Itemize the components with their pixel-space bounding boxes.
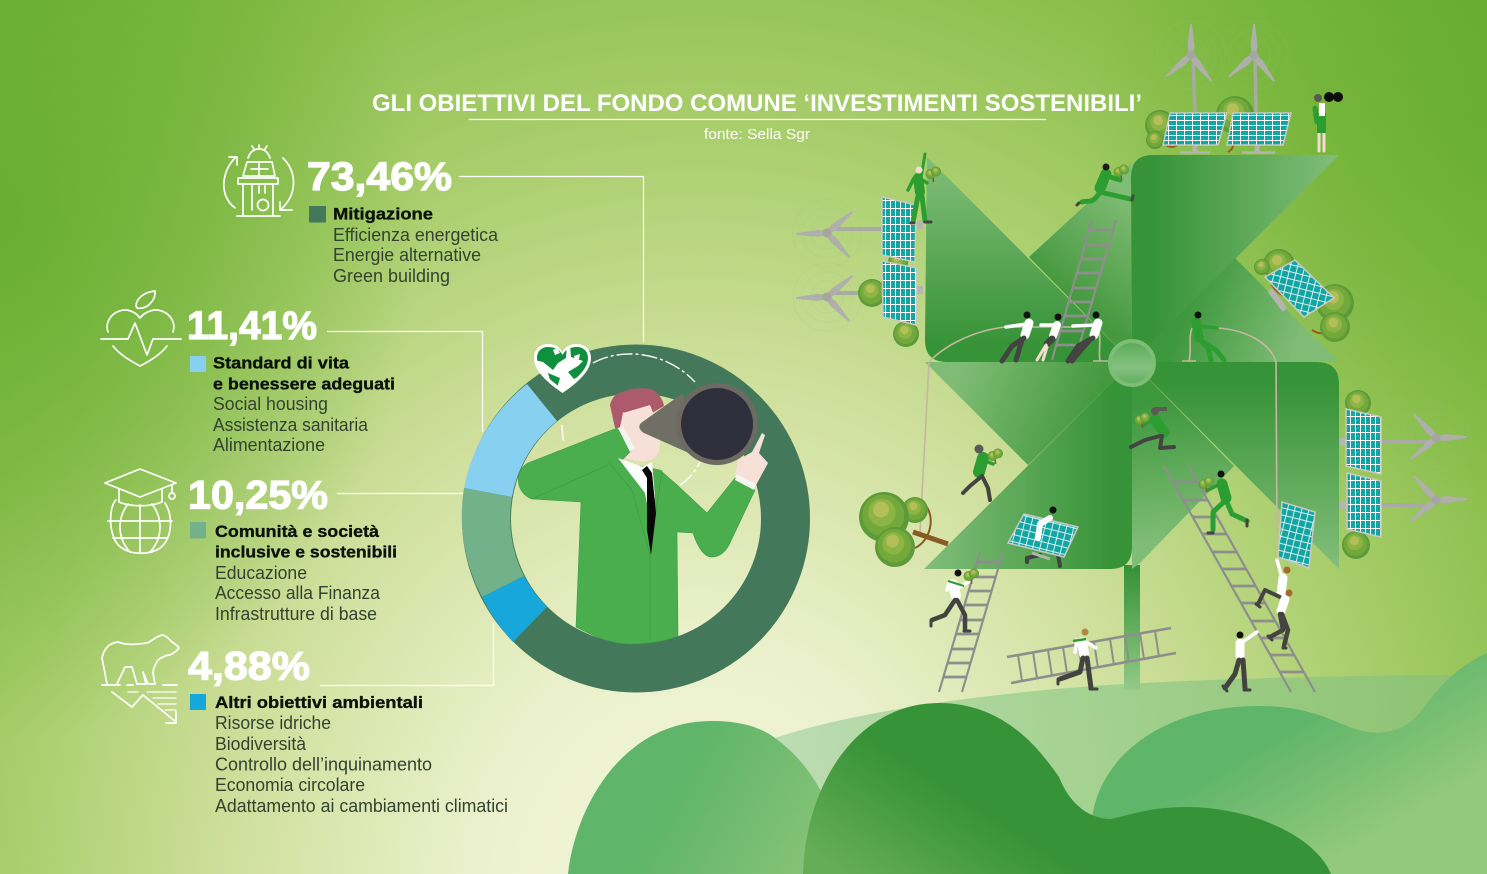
solar panel: hanging [1278, 502, 1315, 568]
heading and list: e benessere adeguati [213, 374, 395, 394]
value: 4,88% [188, 644, 310, 688]
heading and list: Green building [333, 266, 450, 286]
solar panels: top [1163, 113, 1291, 152]
ladder: carried [1007, 628, 1176, 683]
blade bottom [924, 362, 1132, 569]
person: carrying solar panel [1008, 506, 1078, 566]
pinwheel [924, 155, 1339, 569]
person green [1194, 312, 1224, 360]
heading and list: Controllo dell’inquinamento [215, 754, 432, 774]
man with telescope [518, 354, 768, 644]
ladder: upper [1052, 220, 1116, 360]
legend swatch [190, 694, 206, 710]
segment: standard di vita [464, 384, 557, 497]
person: running woman centre [1131, 407, 1174, 448]
title: GLI OBIETTIVI DEL FONDO COMUNE ‘INVESTIMENTI SOSTENIBILI’ [372, 90, 1142, 117]
collar [618, 458, 655, 520]
wind turbines: right [1381, 403, 1471, 535]
icon: apple heart [101, 291, 181, 366]
heading and list [213, 354, 395, 455]
person 1 [1002, 312, 1030, 361]
icon: green building [224, 145, 294, 216]
legend swatch [190, 522, 206, 538]
person: woman with binoculars [1314, 92, 1343, 151]
dashed sight arcs [562, 354, 700, 485]
icon: heart globe [534, 344, 592, 393]
heading and list: Altri obiettivi ambientali [215, 693, 423, 712]
people: climbers on top left [908, 154, 1133, 223]
heading and list: Risorse idriche [215, 713, 331, 733]
person: lifting on ladder [1268, 590, 1292, 648]
value: 10,25% [188, 474, 328, 518]
heading and list: Social housing [213, 394, 328, 414]
panel: altri obiettivi [102, 635, 508, 816]
heading and list: Assistenza sanitaria [213, 415, 369, 435]
heading and list: Comunità e società [215, 522, 380, 541]
heading and list: Alimentazione [213, 435, 325, 455]
source: fonte: Sella Sgr [704, 127, 810, 143]
blade flaps [925, 163, 1339, 569]
heading and list: Mitigazione [333, 204, 433, 224]
segment: altri obiettivi [482, 576, 547, 642]
heading and list: inclusive e sostenibili [215, 542, 397, 562]
trees [858, 96, 1371, 559]
face [618, 405, 660, 462]
telescope [639, 383, 758, 465]
ladder: lower left [939, 552, 1003, 692]
person 3 [1068, 312, 1100, 361]
wind turbines: left [792, 198, 882, 332]
suit [518, 428, 755, 644]
lapels [532, 463, 662, 640]
person jumping [1077, 164, 1133, 205]
heading and list: Biodiversità [215, 734, 307, 754]
tie [642, 466, 656, 555]
person: carrying ladder [1058, 628, 1097, 689]
donut chart [462, 369, 786, 668]
person: running woman left [963, 444, 1003, 500]
connector lines [320, 176, 644, 686]
hand [735, 433, 768, 487]
people: tug of war [1002, 312, 1224, 361]
heading and list [333, 204, 499, 286]
person: green suit on ladder [1198, 470, 1247, 533]
hair [610, 388, 664, 428]
wind turbines: top [1157, 21, 1288, 112]
panel: comunita [105, 469, 397, 624]
heading and list: Accesso alla Finanza [215, 583, 381, 603]
icon: polar bear [102, 635, 179, 723]
heading and list: Infrastrutture di base [215, 604, 377, 624]
heading and list: Efficienza energetica [333, 225, 499, 245]
ropes [920, 327, 1277, 540]
person: white shirt on lower ladder [931, 568, 979, 631]
solar panels: left [882, 197, 923, 325]
solar panel: tilted [1265, 260, 1334, 317]
person 2 [1037, 314, 1062, 360]
heading and list: Standard di vita [213, 354, 350, 372]
solar panels: right [1340, 409, 1381, 537]
big tree [859, 492, 948, 567]
heading and list: Educazione [215, 563, 307, 583]
pinwheel stem [1124, 565, 1140, 690]
heading and list [215, 693, 508, 816]
blade top [1131, 155, 1339, 362]
panel: mitigazione [224, 145, 499, 286]
heading and list: Economia circolare [215, 775, 365, 795]
right cuff [735, 474, 756, 490]
heading and list [215, 522, 397, 624]
ladder: lower right [1164, 465, 1315, 692]
value: 11,41% [187, 304, 317, 348]
legend swatch [309, 206, 326, 222]
heading and list: Energie alternative [333, 245, 481, 265]
value: 73,46% [307, 155, 452, 199]
person: climbing with panel [1256, 560, 1290, 607]
cuff [618, 426, 635, 452]
legend swatch [190, 356, 206, 372]
person arm up [908, 154, 941, 223]
blade right [1132, 362, 1339, 569]
heading and list: Adattamento ai cambiamenti climatici [215, 796, 508, 816]
person: pushing ladder [1223, 632, 1257, 691]
segment: comunita [462, 488, 524, 597]
panel: standard di vita [101, 291, 395, 455]
blade left [925, 157, 1132, 362]
icon: graduation globe [105, 469, 176, 553]
hills [568, 653, 1487, 874]
hub [1110, 341, 1154, 385]
